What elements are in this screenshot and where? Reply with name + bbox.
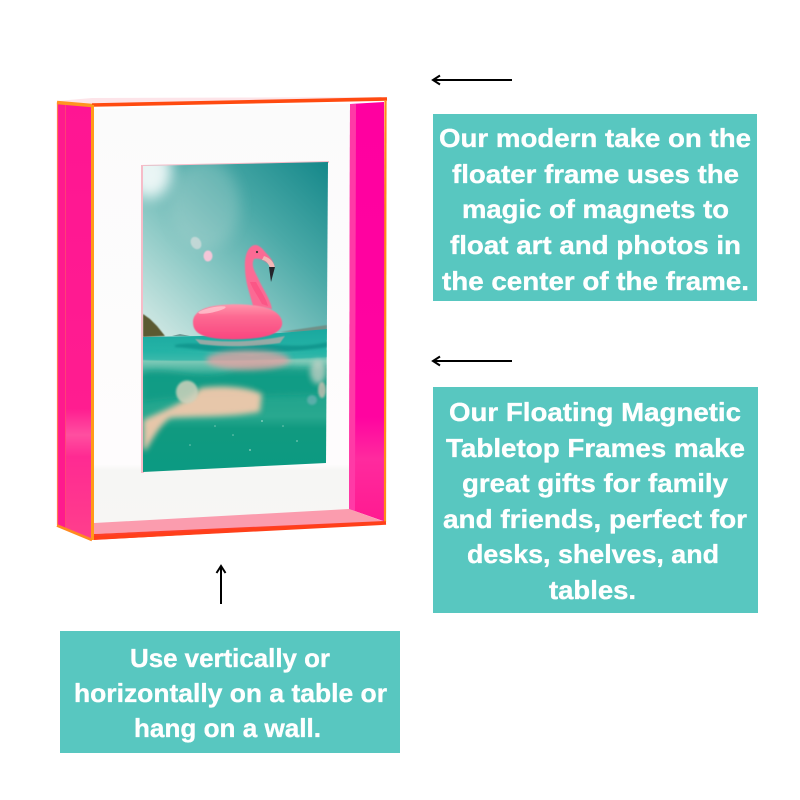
- flamingo float ring: [193, 304, 282, 339]
- arrow: up toward frame: [216, 566, 226, 604]
- callout: magnets floater frame: Our modern take on the: [439, 123, 751, 153]
- callout: usage orientation: hang on a wall.: [134, 713, 321, 743]
- frame right side panel: [349, 102, 386, 522]
- acrylic neon photo frame: [57, 97, 387, 540]
- frame top edge: [57, 97, 387, 105]
- sky: [140, 160, 330, 340]
- lens flares: [190, 236, 202, 250]
- rock and far shore: [143, 314, 165, 337]
- callout: gifts: Tabletop Frames make: [446, 433, 745, 463]
- callout: usage orientation: Use vertically or: [130, 643, 330, 673]
- callout: gifts: tables.: [549, 575, 636, 605]
- water surface ripple: [195, 336, 285, 346]
- sparkles on sea floor: [189, 420, 298, 451]
- flamingo beak: [262, 256, 275, 268]
- callout: magnets floater frame: magic of magnets to: [462, 194, 729, 224]
- white mat: [94, 104, 350, 523]
- callout: usage orientation: [60, 631, 400, 753]
- callout: gifts: [433, 387, 758, 613]
- frame left side panel: [57, 102, 92, 540]
- flamingo neck and head: [245, 245, 274, 309]
- callout: gifts: desks, shelves, and: [467, 539, 719, 569]
- water: [143, 329, 328, 475]
- callout: gifts: great gifts for family: [462, 468, 729, 498]
- neon orange edges: [57, 99, 387, 540]
- dark band below the surface: [143, 366, 328, 402]
- frame bottom panel: [94, 509, 385, 534]
- callout: gifts: Our Floating Magnetic: [449, 397, 741, 427]
- callout: magnets floater frame: float art and photos in: [450, 230, 741, 260]
- callout: usage orientation: horizontally on a table or: [74, 678, 387, 708]
- callout: magnets floater frame: floater frame uses the: [452, 159, 739, 189]
- arrow: middle description pointer: [433, 356, 512, 366]
- callout: magnets floater frame: [433, 114, 757, 301]
- callout: gifts: and friends, perfect for: [443, 504, 747, 534]
- arrow: top description pointer: [433, 76, 512, 84]
- underwater blurred hand: [143, 386, 262, 450]
- framed photo: flamingo float: [141, 161, 329, 473]
- callout: magnets floater frame: the center of the frame.: [442, 266, 749, 296]
